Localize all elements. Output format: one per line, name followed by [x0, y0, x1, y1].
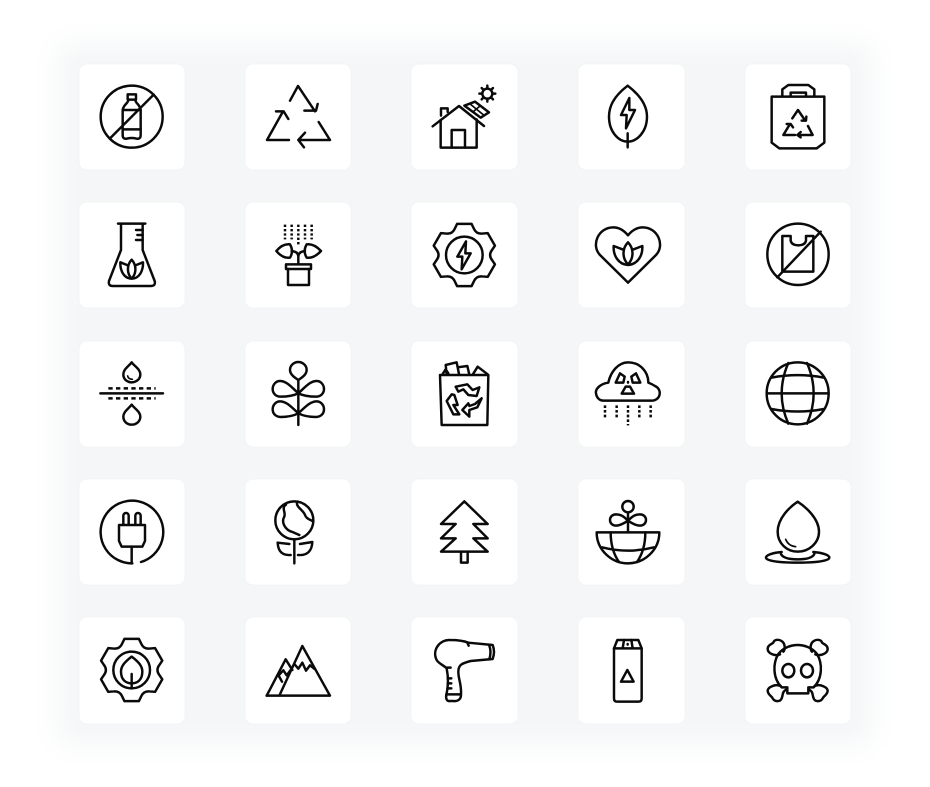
icon: hair dryer: [435, 640, 494, 701]
card: recycling bin: [411, 341, 518, 447]
icon: globe grid: [767, 362, 829, 424]
card: radioactive rain: [578, 341, 685, 447]
icon: no plastic bag: [767, 224, 829, 285]
card: globe: [745, 341, 851, 447]
icon: recycling arrows: [267, 86, 330, 147]
icon: pine tree: [441, 501, 488, 563]
card: recycling symbol: [245, 64, 351, 170]
icon: flask with lotus: [109, 224, 155, 286]
card: watered plant: [245, 202, 351, 308]
card: lab flask: [79, 202, 185, 308]
card: power plug: [79, 479, 185, 585]
card: skull: [745, 617, 851, 724]
icon: earth growing as a flower: [275, 501, 313, 563]
icon: potted plant under rain: [276, 225, 321, 285]
card: eco gear: [79, 617, 185, 724]
card: mountains: [245, 617, 351, 724]
icon: gear with lightning bolt: [434, 224, 495, 286]
icon: full recycling bin: [440, 362, 488, 425]
icon: snowy mountains: [267, 646, 330, 696]
card: recycled bag: [745, 64, 851, 170]
card: solar house: [411, 64, 518, 170]
icon: water drop on puddle: [766, 502, 829, 563]
card: earth flower: [245, 479, 351, 585]
card: branch: [245, 341, 351, 447]
card: no plastic bag: [745, 202, 851, 308]
icon: gear with leaf: [101, 639, 162, 701]
card: spray can: [578, 617, 685, 724]
icon: skull and crossbones: [768, 640, 828, 701]
icon: house with solar panel and sun: [433, 86, 495, 148]
icon: plant branch with looped leaves: [273, 362, 324, 425]
icon: radioactive cloud with rain: [596, 362, 660, 425]
icon: plant on half globe: [597, 501, 659, 563]
icon: shopping bag with recycling symbol: [772, 85, 824, 148]
card: hair dryer: [411, 617, 518, 724]
icon: plug inside circle: [101, 501, 163, 563]
card: half globe plant: [578, 479, 685, 585]
icon: drop passing through a membrane: [100, 362, 163, 425]
icon: no plastic bottle: [101, 86, 163, 148]
card: water filter: [79, 341, 185, 447]
icon: heart with lotus: [596, 227, 660, 283]
card: leaf energy: [578, 64, 685, 170]
card: energy gear: [411, 202, 518, 308]
card: heart lotus: [578, 202, 685, 308]
icon: leaf with lightning bolt: [609, 86, 647, 147]
card: water drop: [745, 479, 851, 585]
icon: aerosol spray can: [614, 640, 642, 702]
card: no plastic bottle: [79, 64, 185, 170]
card: pine tree: [411, 479, 518, 585]
